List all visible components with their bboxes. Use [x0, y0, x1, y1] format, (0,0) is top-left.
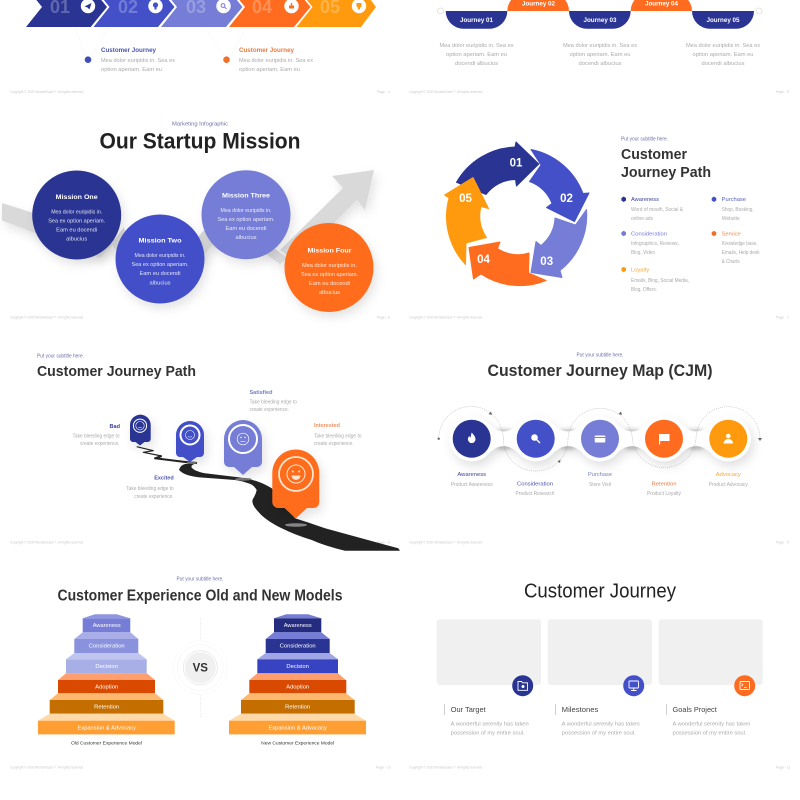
- mission one: Mission One: [56, 194, 98, 201]
- footer: Page - 4: [377, 90, 390, 94]
- label: satisfied: Satisfied: [250, 390, 273, 396]
- card: our target: Our Target: [451, 705, 487, 714]
- callout: customer journey blue: Mea dolor euripidis in. Sea ex: [101, 58, 175, 64]
- mission one: Mea dolor euripidis in.: [51, 210, 103, 216]
- node: purchase: [581, 420, 619, 488]
- legend: purchase: Purchase: [722, 197, 746, 203]
- cycle arrows: 02: [560, 193, 573, 205]
- mission one: Sea ex option aperiam.: [48, 218, 106, 224]
- legend: consideration: Blog, Video: [631, 250, 655, 256]
- label: bad: Take bleeding edge to: [72, 434, 120, 440]
- text block 1: Mea dolor euripidis in. Sea ex: [440, 43, 514, 49]
- legend: awareness: Word of mouth, Social &: [631, 207, 683, 213]
- footer: Page - 11: [776, 766, 791, 770]
- pyramid: old model: [38, 614, 175, 734]
- label: excited: Take bleeding edge to: [126, 486, 174, 492]
- callout: customer journey orange: option aperiam. Eam eu: [239, 67, 300, 73]
- card: milestones: A wonderful serenity has taken: [562, 722, 640, 728]
- legend: purchase: [712, 196, 754, 222]
- mission two: [116, 214, 204, 304]
- mission three: Mission Three: [222, 192, 270, 200]
- legend: purchase: Shop, Booking,: [722, 207, 754, 213]
- label: satisfied: create experience.: [250, 407, 289, 413]
- legend: awareness: online ads: [631, 216, 653, 222]
- node: retention: Product Loyalty: [647, 491, 681, 497]
- mission one: Eam eu docendi: [56, 228, 97, 234]
- callout: customer journey blue: option aperiam. Eam eu: [101, 67, 162, 73]
- legend: purchase: Website: [722, 216, 740, 222]
- legend: loyalty: Emails, Blog, Social Media,: [631, 278, 689, 284]
- legend: loyalty: [621, 267, 689, 293]
- pyramid: old model: Expansion & Advocacy: [77, 726, 136, 732]
- panel: customer journey cards: [409, 581, 791, 770]
- pin: bad: [130, 415, 151, 446]
- legend: awareness: [621, 196, 683, 222]
- winding road: [137, 447, 400, 551]
- subtitle: Put your subtitle here.: [621, 136, 668, 142]
- label: interested: Interested: [314, 423, 341, 429]
- white connected base: [449, 416, 751, 461]
- footer: Copyright © 2020 WonderEase™. All rights reserved.: [409, 766, 483, 770]
- mission one: [32, 170, 121, 260]
- subtitle: Marketing Infographic: [172, 122, 228, 128]
- chevron icons: [81, 0, 366, 13]
- card: goals project: A wonderful serenity has taken: [672, 722, 750, 728]
- node: purchase: Store Visit: [589, 482, 611, 488]
- label: bad: Bad: [110, 424, 121, 430]
- neck shadows: [496, 430, 704, 450]
- footer: Page - 10: [376, 766, 391, 770]
- legend: service: & Charts: [722, 259, 740, 265]
- card: our target: possession of my entire soul.: [451, 731, 525, 737]
- panel: chevron timeline: [10, 0, 390, 94]
- footer: Copyright © 2020 WonderEase™. All rights reserved.: [10, 316, 84, 320]
- node: awareness: Product Awareness: [451, 482, 493, 488]
- callout: customer journey blue: [85, 47, 175, 73]
- text block 2: docendi albucius: [578, 61, 622, 67]
- pyramid: new model: Expansion & Advocacy: [268, 726, 327, 732]
- label: excited: [126, 476, 174, 500]
- footer: Copyright © 2020 WonderEase™. All rights reserved.: [10, 766, 84, 770]
- node: advocacy: Product Advocacy: [709, 482, 748, 488]
- text block 3: [686, 43, 760, 67]
- legend: service: Service: [722, 232, 741, 238]
- title: Customer Journey: [524, 581, 676, 603]
- pyramid: old model: Consideration: [89, 644, 125, 650]
- dashed path with arrows: [439, 406, 760, 471]
- footer: Page - 9: [776, 540, 789, 544]
- pyramid: old model: Retention: [94, 705, 119, 711]
- text block 3: docendi albucius: [702, 61, 745, 67]
- label: interested: create experience.: [314, 441, 354, 447]
- text block 2: Mea dolor euripidis in. Sea ex: [563, 43, 637, 49]
- cycle arrows: 03: [540, 256, 553, 268]
- mission two: Mission Two: [138, 238, 182, 244]
- subtitle: Put your subtitle here.: [576, 352, 624, 358]
- legend: consideration: [621, 231, 679, 256]
- footer: [10, 766, 391, 770]
- footer: Copyright © 2020 WonderEase™. All rights reserved.: [409, 316, 483, 320]
- title: Customer Journey Path: [37, 364, 196, 380]
- mission four: Eam eu docendi: [309, 281, 350, 287]
- title: [621, 147, 711, 181]
- wave segments: Journey 03: [584, 17, 617, 24]
- title: Customer Experience Old and New Models: [58, 588, 342, 604]
- cycle arrows: 04: [477, 254, 490, 266]
- node: consideration: [516, 420, 555, 497]
- legend: service: Emails, Help desk: [722, 250, 760, 256]
- pin: interested: [272, 449, 319, 518]
- footer: [10, 316, 390, 320]
- connector lines: [75, 28, 245, 58]
- footer: Page - 7: [776, 316, 789, 320]
- dashed path markers: [438, 412, 762, 463]
- pin: satisfied: [224, 420, 262, 475]
- text block 2: option aperiam. Eam eu: [570, 52, 631, 58]
- pyramid: new model: Retention: [285, 705, 310, 711]
- versus badge: [173, 618, 227, 718]
- versus badge: VS: [193, 663, 208, 675]
- card: milestones: possession of my entire soul.: [562, 731, 636, 737]
- label: bad: create experience.: [80, 441, 120, 447]
- subtitle: Put your subtitle here.: [176, 576, 224, 582]
- end nodes: [438, 8, 762, 14]
- footer: Page - 6: [377, 316, 390, 320]
- text block 3: option aperiam. Eam eu: [692, 52, 754, 58]
- pyramid: new model: Adoption: [286, 684, 309, 690]
- callout: customer journey orange: [223, 47, 313, 73]
- panel: customer journey path cycle: [409, 136, 789, 320]
- mission one: albucius: [66, 236, 87, 242]
- label: interested: Take bleeding edge to: [314, 434, 362, 440]
- pyramid: new model: [229, 614, 366, 734]
- pin: excited: [176, 421, 204, 462]
- node: retention: [645, 420, 683, 497]
- panel: customer journey map: [409, 352, 789, 544]
- label: satisfied: Take bleeding edge to: [250, 400, 297, 406]
- callout: customer journey orange: Customer Journey: [239, 47, 295, 54]
- wave segments: Journey 04: [645, 1, 678, 8]
- subtitle: Put your subtitle here.: [37, 354, 84, 360]
- label: bad: [72, 424, 121, 447]
- wave segments: Journey 05: [706, 17, 740, 24]
- panel: journey wave: [409, 0, 789, 94]
- mission two: Sea ex option aperiam.: [132, 262, 189, 268]
- title: Our Startup Mission: [100, 128, 300, 154]
- footer: [409, 540, 789, 544]
- cycle arrows: 01: [510, 158, 523, 170]
- node: advocacy: Advocacy: [716, 472, 741, 478]
- footer: [10, 540, 390, 544]
- footer: Copyright © 2020 WonderEase™. All rights reserved.: [409, 540, 483, 544]
- footer: Copyright © 2020 WonderEase™. All rights reserved.: [409, 90, 483, 94]
- footer: Page - 8: [377, 540, 390, 544]
- cycle arrows: 05: [459, 193, 472, 205]
- card: our target: A wonderful serenity has taken: [451, 722, 529, 728]
- mission two: albucius: [150, 280, 171, 286]
- pyramid: old model: Awareness: [93, 623, 121, 629]
- chevron arrows 01-05: [26, 0, 376, 27]
- mission three: [202, 170, 290, 259]
- card: goals project: possession of my entire soul.: [672, 731, 746, 737]
- text block 1: option aperiam. Eam eu: [446, 52, 507, 58]
- legend: service: [712, 231, 760, 265]
- growth arrow: [2, 170, 374, 264]
- legend: consideration: Consideration: [631, 232, 667, 238]
- mission three: albucius: [236, 235, 257, 241]
- card: milestones: Milestones: [562, 705, 599, 714]
- mission two: Eam eu docendi: [140, 271, 180, 277]
- label: excited: create experience.: [134, 494, 174, 500]
- mission four: Mea dolor euripidis in.: [302, 263, 357, 269]
- text block 2: [563, 43, 637, 67]
- footer: [409, 90, 789, 94]
- card: milestones: [548, 619, 652, 737]
- node: consideration: Consideration: [517, 482, 553, 488]
- legend: service: Knowledge base,: [722, 241, 758, 247]
- caption: new model: New Customer Experience Model: [261, 740, 334, 746]
- footer: Copyright © 2020 WonderEase™. All rights reserved.: [10, 90, 84, 94]
- node: retention: Retention: [652, 482, 676, 488]
- pyramid: new model: Awareness: [284, 623, 312, 629]
- text block 3: Mea dolor euripidis in. Sea ex: [686, 43, 760, 49]
- footer: [409, 766, 791, 770]
- footer: [409, 316, 789, 320]
- mission two: Mea dolor euripidis in.: [134, 253, 186, 259]
- footer: [10, 90, 390, 94]
- panel: our startup mission: [2, 122, 390, 320]
- pyramid: old model: Adoption: [95, 684, 118, 690]
- pyramid: new model: Decision: [286, 664, 309, 670]
- legend: loyalty: Loyalty: [631, 268, 649, 274]
- title: Journey Path: [621, 165, 711, 181]
- mission four: Sea ex option aperiam.: [301, 272, 358, 278]
- legend: loyalty: Blog, Offers.: [631, 287, 657, 293]
- caption: old model: Old Customer Experience Model: [71, 740, 142, 746]
- panel: old and new models: [10, 576, 391, 770]
- wave segments: [446, 0, 754, 29]
- label: excited: Excited: [154, 476, 174, 482]
- pyramid: new model: Consideration: [280, 644, 316, 650]
- footer: Page - 5: [776, 90, 789, 94]
- cycle arrows: [444, 142, 589, 286]
- node: awareness: [451, 420, 493, 488]
- mission four: albucius: [319, 290, 340, 296]
- footer: Copyright © 2020 WonderEase™. All rights reserved.: [10, 540, 84, 544]
- callout: customer journey orange: Mea dolor euripidis in. Sea ex: [239, 58, 313, 64]
- mission four: [284, 223, 374, 312]
- mission three: Mea dolor euripidis in.: [220, 208, 272, 214]
- title: Customer Journey Map (CJM): [488, 362, 712, 380]
- wave segments: Journey 02: [522, 1, 555, 8]
- text block 1: [440, 43, 514, 67]
- callout: customer journey blue: Customer Journey: [101, 47, 157, 54]
- node: consideration: Product Research: [516, 491, 554, 497]
- node: advocacy: [709, 420, 748, 488]
- legend: awareness: Awareness: [631, 197, 659, 203]
- label: satisfied: [250, 390, 297, 413]
- card: goals project: [659, 619, 763, 737]
- node: awareness: Awareness: [457, 472, 486, 478]
- title: Customer: [621, 147, 687, 163]
- card: goals project: Goals Project: [672, 705, 718, 714]
- mission three: Eam eu docendi: [226, 226, 266, 232]
- text block 1: docendi albucius: [455, 61, 498, 67]
- card: our target: [437, 619, 541, 737]
- wave segments: Journey 01: [460, 17, 493, 24]
- label: interested: [314, 423, 362, 447]
- pyramid: old model: Decision: [95, 664, 118, 670]
- mission three: Sea ex option aperiam.: [218, 217, 275, 223]
- panel: customer journey road: [10, 354, 400, 551]
- mission four: Mission Four: [308, 248, 352, 254]
- node: purchase: Purchase: [588, 472, 612, 478]
- legend: consideration: Infographics, Reviews,: [631, 241, 679, 247]
